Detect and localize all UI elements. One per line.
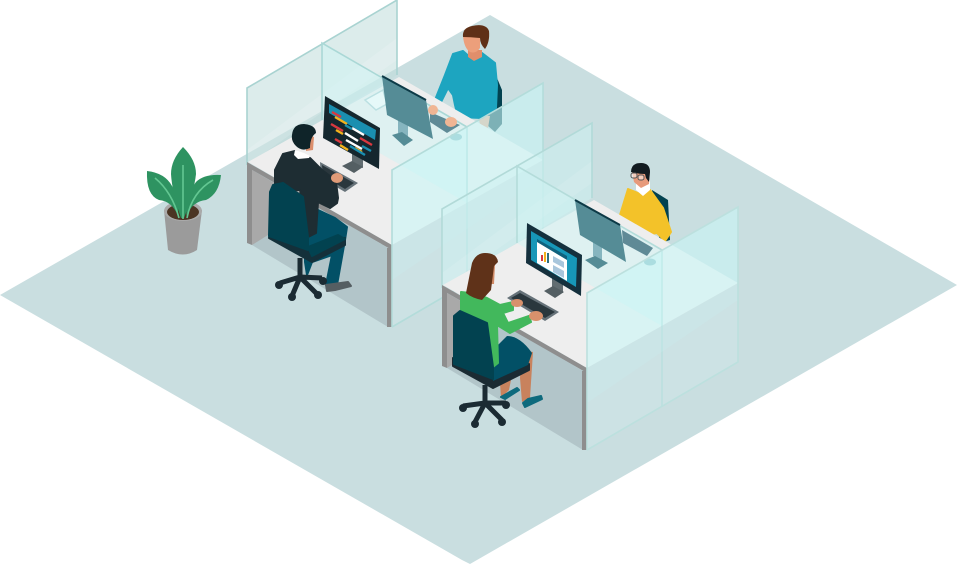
desk 1: [247, 0, 543, 327]
desk 1 under-desk shadow: [252, 168, 388, 327]
desk 2 front person: [453, 253, 543, 428]
desk 1 notebook: [365, 90, 387, 110]
desk 2 mouse: [644, 258, 656, 266]
desk 1 back person: [433, 25, 502, 132]
desk 2 keyboard: [507, 290, 559, 321]
desk 1 back hands: [428, 105, 457, 127]
desk 2 front leg: [582, 371, 587, 450]
desk 1 mouse: [450, 134, 462, 140]
desk 1 front glass: upper: [392, 83, 543, 245]
collar: [294, 150, 310, 159]
torso: [275, 151, 338, 237]
desk 1 front monitor: [323, 96, 380, 173]
desk 1 front glass: lower: [392, 160, 543, 327]
shoes: [523, 396, 542, 407]
hand: [331, 173, 343, 183]
desk 1 back monitor: [382, 76, 433, 146]
chair base: [280, 258, 322, 296]
desk 2 under-desk shadow: [447, 291, 583, 450]
chair seat: [269, 232, 345, 262]
face: [488, 265, 495, 284]
hands: [511, 299, 543, 321]
chair seat: [453, 358, 529, 388]
desk 2 glass band: [587, 283, 738, 403]
desk 2: [442, 123, 738, 450]
desk 1 back keyboard: [430, 112, 460, 133]
desk 2 back person: [620, 163, 671, 243]
chair base: [463, 385, 506, 422]
desk 2 back keyboard: [622, 230, 653, 256]
chair back: [269, 183, 308, 250]
skirt: [493, 336, 532, 381]
desk 2 top: [443, 200, 738, 368]
desk 1 legs: [247, 165, 252, 245]
desk 1 gray side: [252, 170, 276, 245]
desk 2 front monitor: [526, 223, 582, 298]
desk 1 front leg: [387, 248, 392, 327]
plant: [147, 147, 221, 254]
head: [306, 134, 314, 151]
desk 2 front glass: lower: [587, 283, 738, 450]
desk 2 edge: [442, 285, 587, 373]
chair back: [454, 311, 493, 379]
desk 2 legs: [442, 288, 447, 368]
desk 1 edge: [247, 162, 392, 250]
desk 1 front person: [269, 124, 351, 301]
desk 2 divider glass: [517, 166, 662, 407]
desk 2 back monitor: [575, 200, 626, 269]
desk 1 glass band: [392, 160, 543, 280]
desk 2 front glass: upper: [587, 207, 738, 368]
desk 1 front glass edge: [392, 83, 543, 327]
legs: [305, 210, 347, 285]
body: [461, 292, 531, 367]
desk 2 left glass panel: [442, 123, 592, 288]
desk 1 left glass panel: [247, 0, 397, 165]
shoe: [326, 282, 351, 291]
desk 1 divider glass: [322, 43, 467, 284]
desk 1 keyboard: [320, 162, 358, 192]
desk 1 top: [248, 77, 543, 245]
desk 2 gray side: [447, 293, 471, 368]
hair: [466, 253, 498, 300]
desk 2 front glass edge: [587, 207, 738, 450]
legs: [520, 350, 533, 402]
